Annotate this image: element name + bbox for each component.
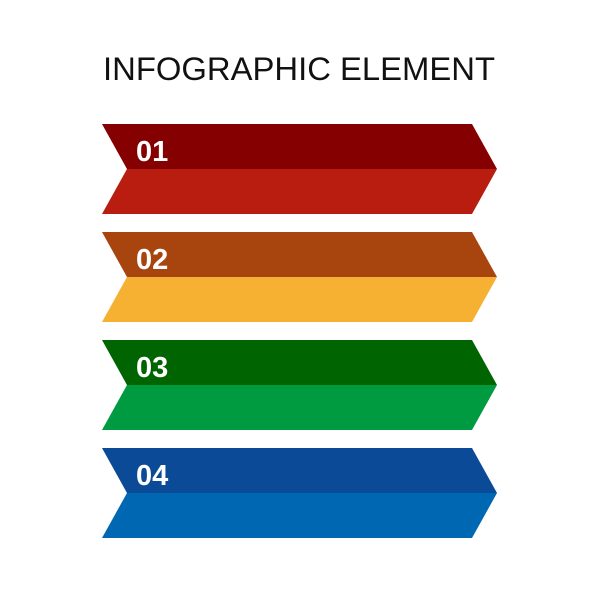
banner 04: 04 (136, 460, 168, 492)
banner 01 (102, 124, 497, 214)
banner 02: 02 (136, 244, 168, 276)
banner 01: 01 (136, 136, 168, 168)
banner 03: 03 (136, 352, 168, 384)
banner 02 (102, 232, 497, 322)
banner 04 (102, 448, 497, 538)
banner 03 (102, 340, 497, 430)
title: INFOGRAPHIC ELEMENT (103, 51, 495, 87)
